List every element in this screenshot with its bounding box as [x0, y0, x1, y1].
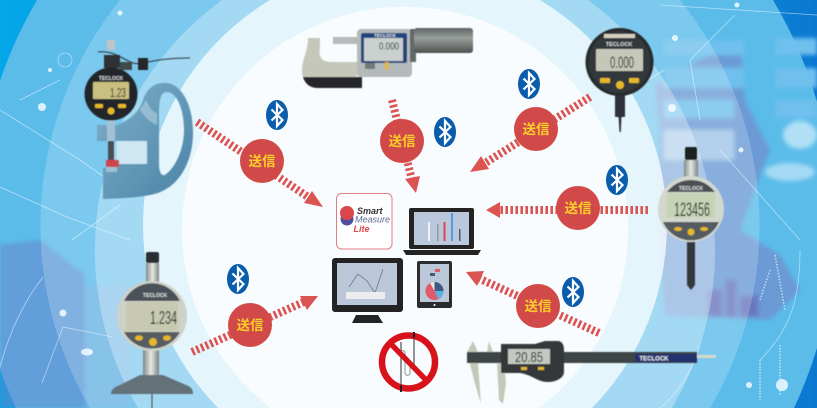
- icon: bluetooth: [266, 100, 288, 130]
- arrow: test indicator to software: [470, 97, 590, 172]
- arrow: depth gauge to software: [192, 296, 318, 352]
- instrument: digital caliper: 20.85: [515, 349, 543, 366]
- desktop monitor with line chart: [332, 258, 403, 323]
- logo mark: [340, 206, 354, 226]
- send badge: 送信: [248, 153, 276, 169]
- logo wordmark: [354, 206, 390, 234]
- instrument: digital test indicator: [586, 28, 654, 132]
- instrument: digital dial indicator: TECLOCK: [679, 186, 703, 192]
- instrument: digital depth gauge: 1.234: [150, 308, 177, 328]
- instrument: digital caliper: TECLOCK: [640, 356, 669, 362]
- send badge: [556, 186, 600, 230]
- send badge: 送信: [524, 298, 552, 314]
- send badge: 送信: [236, 317, 264, 333]
- instrument: digital micrometer: [302, 28, 473, 88]
- tablet with pie chart: [417, 261, 452, 308]
- logo wordmark: Smart: [357, 206, 384, 216]
- logo wordmark: Measure: [355, 214, 390, 224]
- icon: bluetooth: [227, 264, 249, 294]
- instrument: thickness gauge: 1.23: [110, 85, 126, 100]
- icon: bluetooth: [562, 277, 584, 307]
- send badge: 送信: [522, 121, 550, 137]
- instrument: digital depth gauge: [111, 252, 193, 408]
- send badge: 送信: [564, 200, 592, 216]
- instrument: digital micrometer: 0.000: [379, 42, 399, 52]
- icon: bluetooth: [434, 117, 456, 147]
- instrument: thickness gauge: [84, 40, 193, 199]
- arrow: micrometer to software: [380, 100, 424, 193]
- logo card: Smart Measure Lite: [336, 194, 392, 249]
- icon: bluetooth: [606, 165, 628, 195]
- instrument: digital depth gauge: TECLOCK: [143, 293, 167, 299]
- arrow: thickness gauge to software: [197, 122, 323, 207]
- icon: bluetooth: [518, 69, 540, 99]
- arrow: caliper to software: [466, 271, 599, 333]
- instrument: digital caliper: [467, 341, 716, 404]
- instrument: digital dial indicator: 123456: [674, 200, 710, 221]
- arrow: dial indicator to software: [486, 186, 648, 230]
- send badge: 送信: [388, 133, 416, 149]
- no-cable prohibition sign: [382, 332, 435, 392]
- laptop with bar chart: [403, 208, 481, 255]
- instrument: digital test indicator: 0.000: [610, 53, 634, 72]
- instrument: thickness gauge: TECLOCK: [99, 76, 123, 82]
- instrument: digital test indicator: TECLOCK: [606, 42, 632, 48]
- instrument: digital micrometer: TECLOCK: [374, 33, 397, 38]
- instrument: digital dial indicator: [658, 147, 724, 290]
- logo wordmark: Lite: [354, 224, 370, 234]
